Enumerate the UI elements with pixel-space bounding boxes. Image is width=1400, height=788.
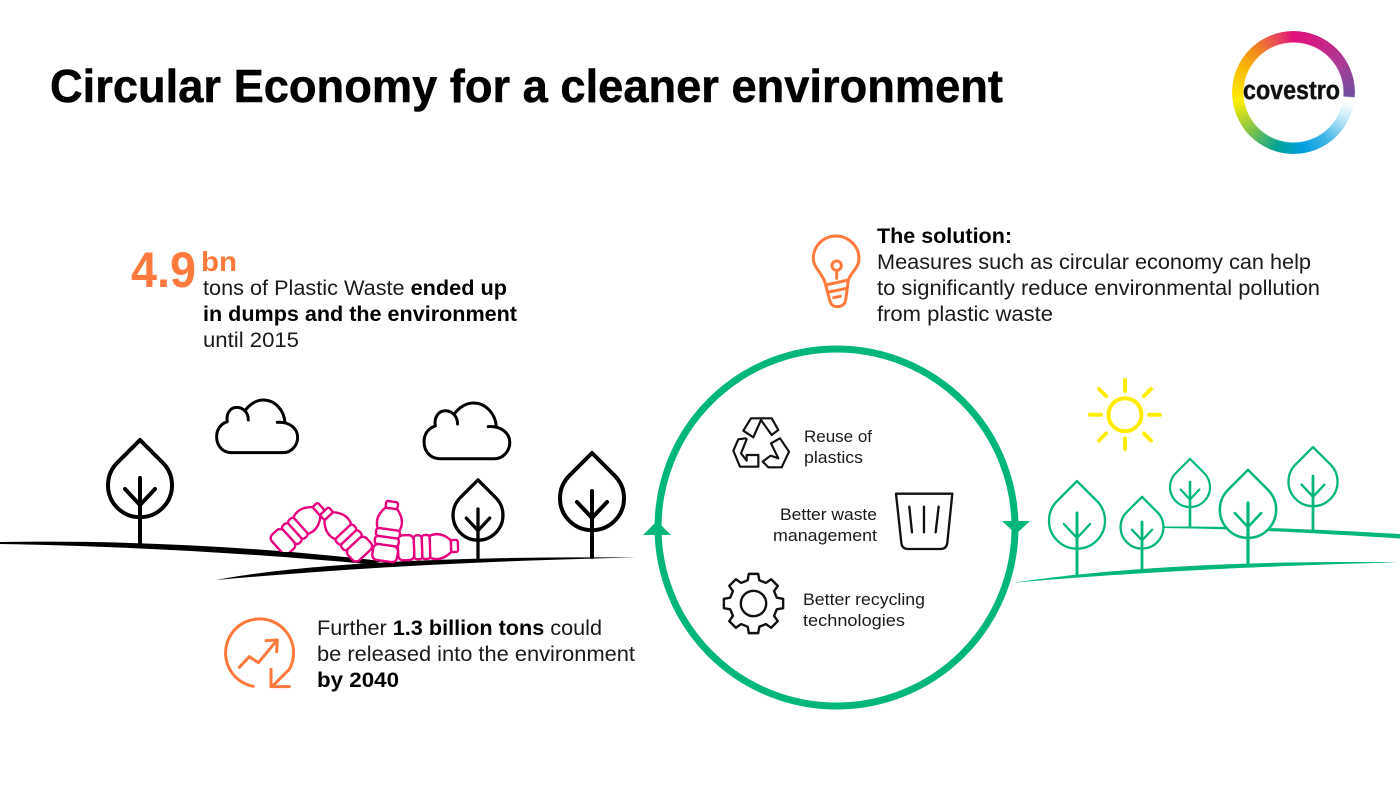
tree right bbox=[560, 453, 624, 557]
label: better waste management: management bbox=[773, 526, 877, 545]
green tree 5 bbox=[1288, 447, 1338, 530]
arrow down bbox=[1002, 521, 1030, 534]
arrow up bbox=[643, 521, 671, 535]
text block: the solution bbox=[877, 225, 1320, 326]
label: reuse of plastics: plastics bbox=[804, 448, 863, 467]
circular economy ring bbox=[643, 349, 1030, 706]
description line 1: tons of Plastic Waste ended up bbox=[203, 277, 507, 300]
clean landscape bbox=[1012, 447, 1400, 583]
icon: sun bbox=[1090, 380, 1160, 449]
further line 3: by 2040 bbox=[317, 669, 399, 692]
label: better waste management bbox=[773, 505, 877, 545]
title: Circular Economy for a cleaner environment bbox=[50, 60, 1003, 112]
plastic bottles bbox=[269, 498, 458, 564]
further line 2: be released into the environment bbox=[317, 643, 635, 666]
ground lines bbox=[0, 542, 636, 580]
solution line 3: from plastic waste bbox=[877, 303, 1053, 326]
further line 1: Further 1.3 billion tons could bbox=[317, 617, 602, 640]
solution line 2: to significantly reduce environmental pollution bbox=[877, 277, 1320, 300]
polluted landscape bbox=[0, 440, 636, 580]
icon: light bulb bbox=[813, 236, 859, 307]
icon: gear bbox=[724, 574, 783, 633]
icon: growth trend bbox=[226, 619, 294, 687]
green tree 1 bbox=[1049, 481, 1105, 575]
label: reuse of plastics bbox=[804, 427, 872, 467]
text block: 4.9bn tons of plastic waste bbox=[131, 242, 517, 352]
logo wordmark: covestro bbox=[1243, 77, 1340, 105]
solution line 1: Measures such as circular economy can help bbox=[877, 251, 1311, 274]
label: better recycling technologies: technologies bbox=[803, 611, 905, 630]
text block: further 1.3 billion tons bbox=[317, 617, 635, 692]
tree left bbox=[108, 440, 172, 545]
description line 2: in dumps and the environment bbox=[203, 303, 517, 326]
solution heading: The solution: bbox=[877, 225, 1012, 248]
icon: cloud right bbox=[424, 403, 510, 459]
label: better waste management: Better waste bbox=[780, 505, 877, 524]
green tree 3 bbox=[1170, 459, 1210, 527]
label: better recycling technologies: Better recycling bbox=[803, 590, 925, 609]
description line 3: until 2015 bbox=[203, 329, 299, 352]
green ground lines bbox=[1012, 526, 1400, 583]
icon: cloud left bbox=[217, 400, 298, 453]
ring bbox=[658, 349, 1015, 706]
unit: bn bbox=[201, 246, 237, 277]
tree small bbox=[453, 480, 503, 558]
big number: 4.9 bbox=[131, 242, 196, 298]
icon: waste bin bbox=[896, 494, 952, 549]
logo: covestro bbox=[1232, 31, 1355, 154]
logo ring bbox=[1232, 31, 1355, 154]
green tree 4 bbox=[1220, 470, 1276, 564]
icon: recycling bbox=[733, 418, 789, 467]
label: better recycling technologies bbox=[803, 590, 925, 630]
green tree 2 bbox=[1121, 497, 1163, 570]
label: reuse of plastics: Reuse of bbox=[804, 427, 872, 446]
